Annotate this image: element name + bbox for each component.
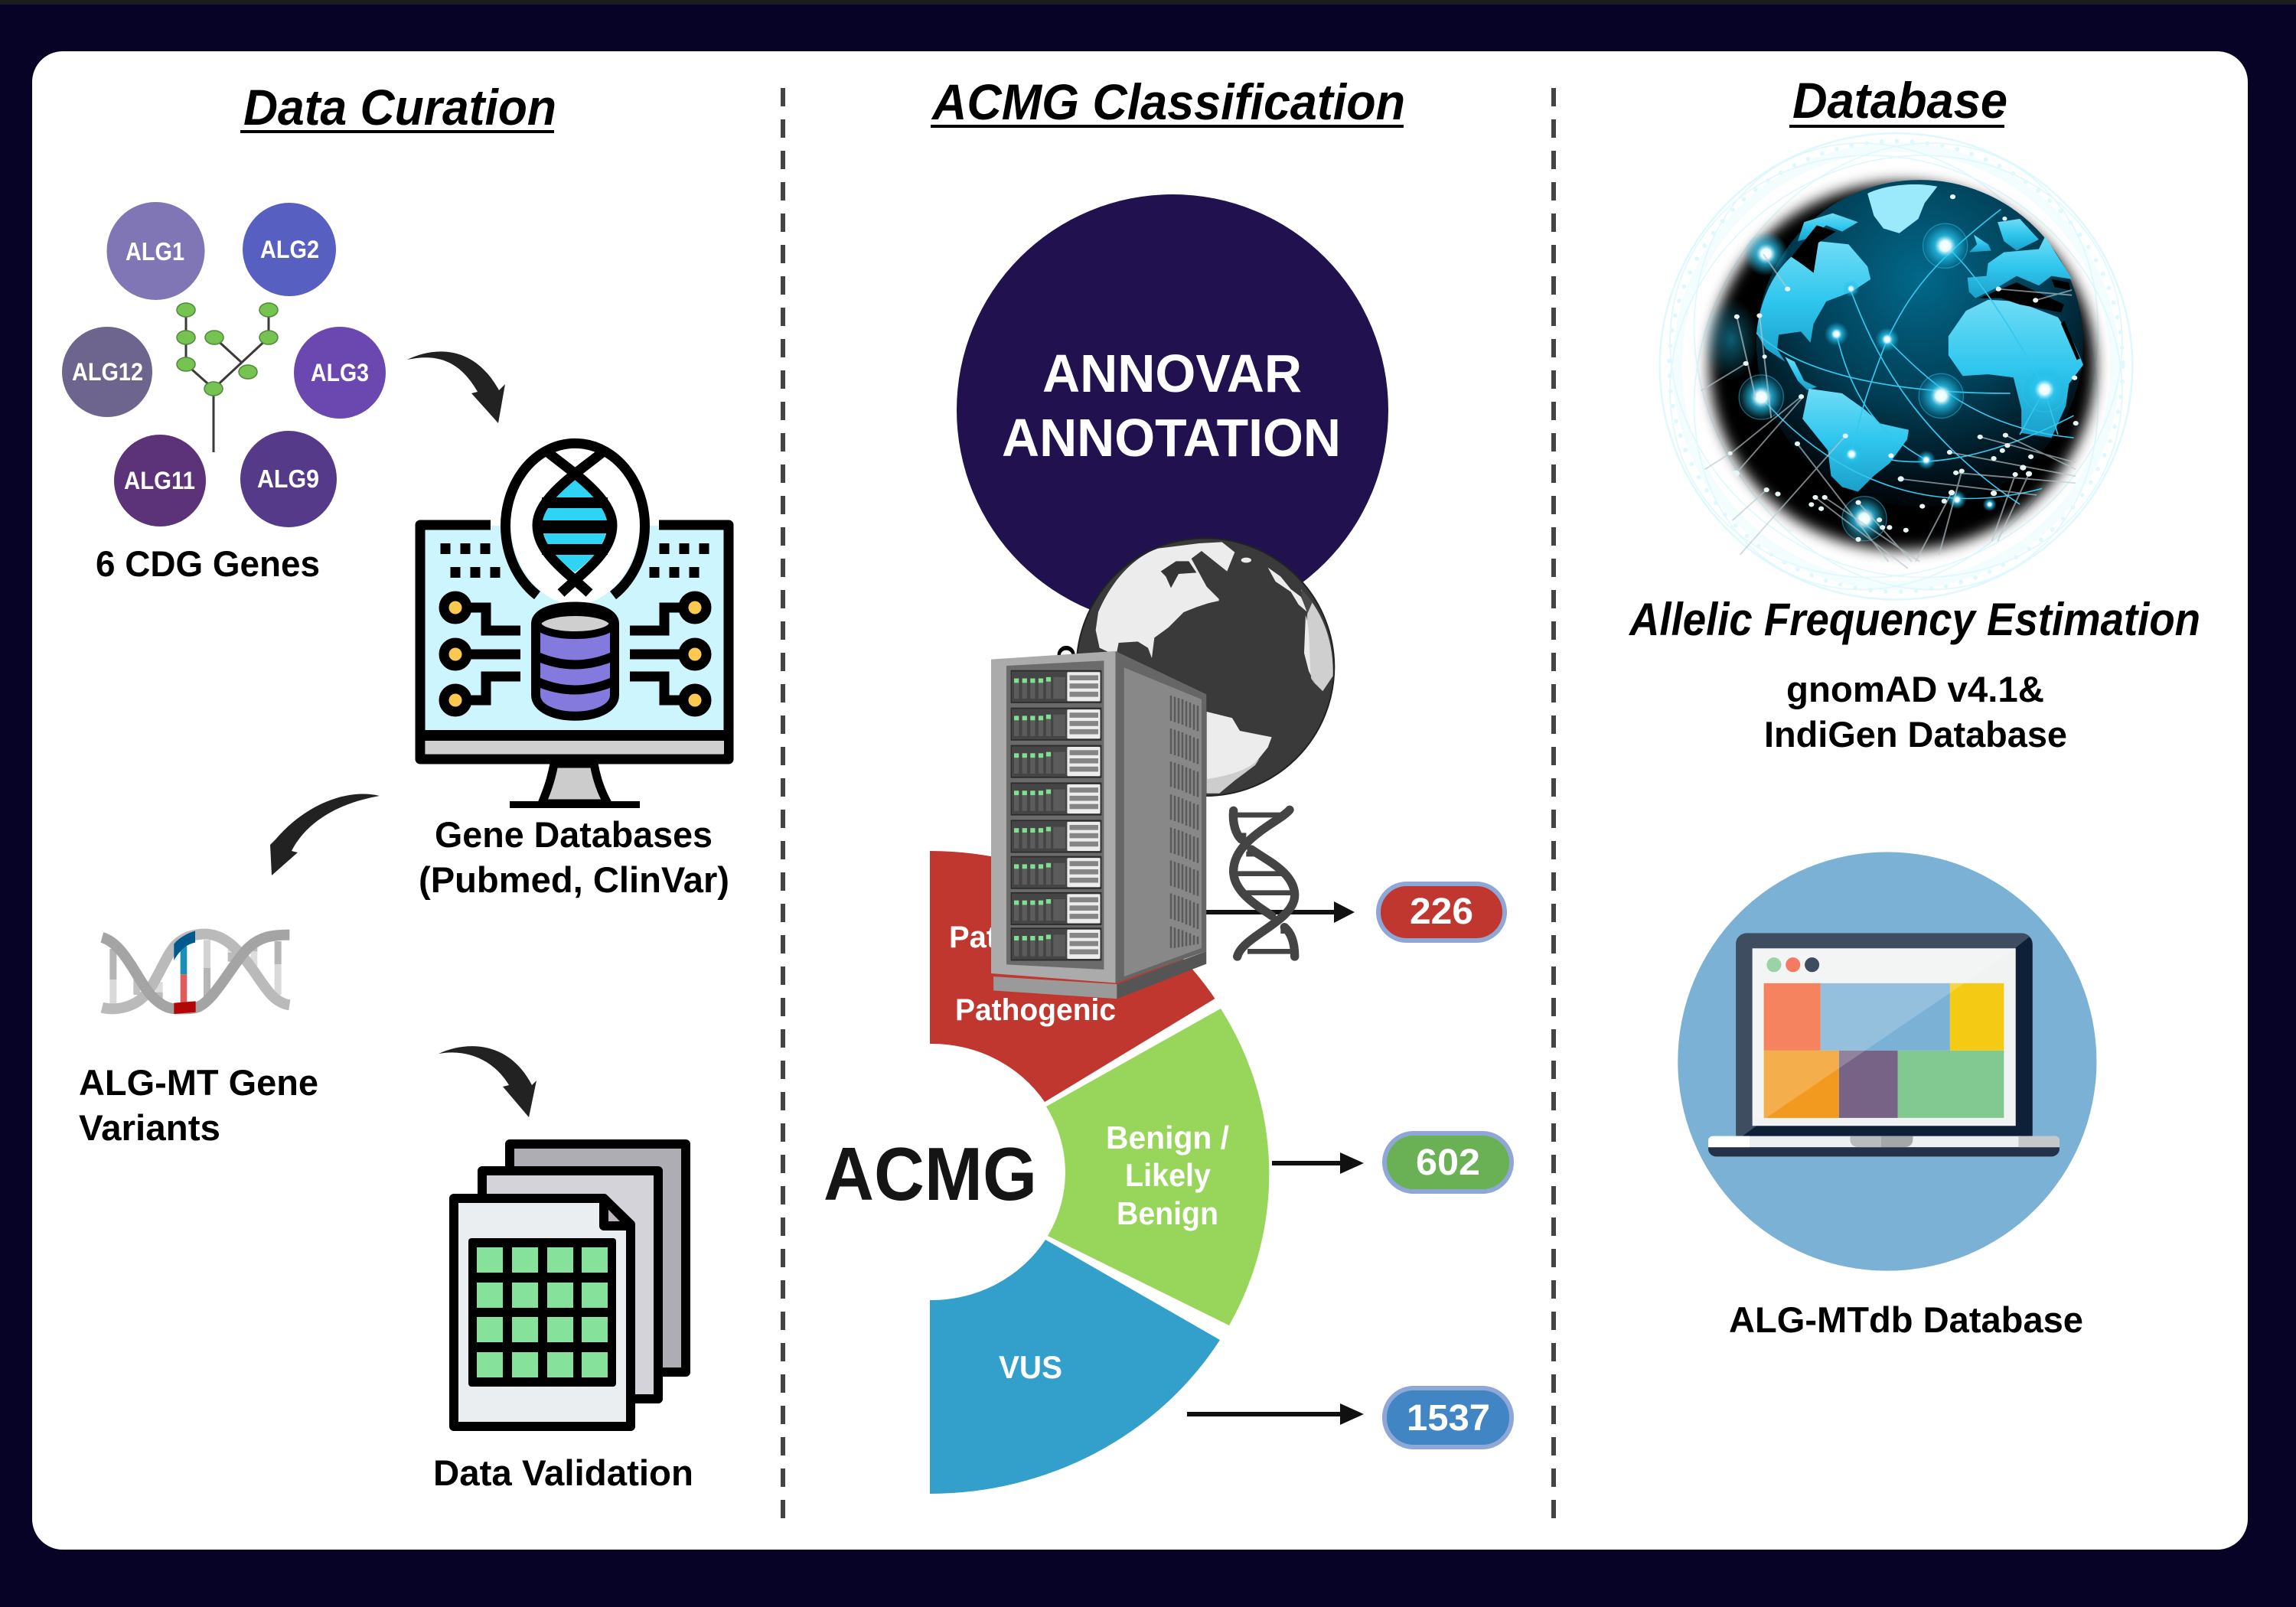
heading: database: Database xyxy=(1792,72,2007,129)
label: benign / likely benign: Benign xyxy=(1117,1195,1218,1231)
icon: DNA helix xyxy=(1233,810,1295,957)
annotation circle: ANNOVAR: ANNOTATION xyxy=(1002,408,1341,468)
gene: ALG2: ALG2 xyxy=(260,236,319,263)
count pill: 226 xyxy=(1378,884,1505,940)
icon: monitor with DNA and database xyxy=(420,424,729,808)
segment: pathogenic xyxy=(930,851,1215,1102)
icon: grey globe xyxy=(1077,538,1334,796)
gene: ALG3: ALG3 xyxy=(311,359,369,386)
count pill: 226: 226 xyxy=(1410,892,1473,932)
label: gnomAD and IndiGen: IndiGen Database xyxy=(1764,714,2067,755)
label: data validation: Data Validation xyxy=(433,1452,693,1493)
icon: grey DNA with highlighted variant xyxy=(102,931,289,1014)
gene: ALG12 xyxy=(62,327,152,417)
label: gnomAD and IndiGen: gnomAD v4.1& xyxy=(1786,669,2044,709)
icon: stacked data sheets xyxy=(454,1144,686,1426)
label: VUS: VUS xyxy=(999,1349,1062,1385)
label: benign / likely benign: Likely xyxy=(1125,1157,1212,1193)
panel: ACMG classification xyxy=(823,73,1512,1494)
label: pathogenic: Pathogenic xyxy=(955,993,1116,1027)
label: gnomAD and IndiGen xyxy=(1764,669,2067,755)
arrow: variants to validation xyxy=(439,1046,536,1117)
heading: data curation: Data Curation xyxy=(243,79,556,135)
label: ALG-MT gene variants: Variants xyxy=(79,1107,220,1148)
count pill: 602 xyxy=(1384,1133,1512,1191)
arrow: databases to variants xyxy=(270,794,380,875)
icon: networked blue globe xyxy=(1593,70,2200,663)
label: ALG-MT gene variants xyxy=(79,1062,318,1148)
gene: ALG11 xyxy=(114,435,206,526)
count pill: 1537 xyxy=(1384,1388,1512,1447)
label: 6 CDG genes: 6 CDG Genes xyxy=(96,543,320,584)
annotation circle: ANNOVAR xyxy=(957,194,1388,626)
arrow: pathogenic count xyxy=(1194,901,1355,923)
icon: server rack xyxy=(991,648,1206,999)
label: gene databases: (Pubmed, ClinVar) xyxy=(419,859,729,900)
gene: ALG11: ALG11 xyxy=(124,467,195,494)
gene: ALG2 xyxy=(243,203,336,296)
label: ALG-MT gene variants: ALG-MT Gene xyxy=(79,1062,318,1103)
gene circles with tree xyxy=(62,202,386,527)
gene: ALG9 xyxy=(240,431,337,527)
icon: laptop in blue circle xyxy=(1678,852,2096,1271)
label: benign / likely benign xyxy=(1106,1120,1229,1231)
arrow: benign count xyxy=(1272,1152,1364,1174)
label: allelic frequency estimation: Allelic Frequency Estimation xyxy=(1628,594,2200,645)
gene: ALG3 xyxy=(294,327,386,419)
segment: VUS xyxy=(930,1240,1220,1494)
gene: ALG12: ALG12 xyxy=(72,358,143,386)
icon: branching tree xyxy=(177,303,278,452)
heading: ACMG classification: ACMG Classification xyxy=(931,73,1405,130)
annotation circle: ANNOVAR: ANNOVAR xyxy=(1042,344,1302,403)
panel: data curation xyxy=(62,79,729,1493)
panel: database xyxy=(1593,70,2200,1340)
count pill: 602: 602 xyxy=(1416,1143,1480,1183)
gene: ALG9: ALG9 xyxy=(257,464,319,493)
segment: benign xyxy=(1046,1009,1269,1325)
label: pathogenic (upper, cut off): Pat xyxy=(949,921,996,954)
gene: ALG1 xyxy=(107,202,205,300)
label: gene databases: Gene Databases xyxy=(435,814,713,855)
top window strip xyxy=(0,0,2296,5)
label: benign / likely benign: Benign / xyxy=(1106,1120,1229,1156)
label: ACMG: ACMG xyxy=(823,1132,1037,1216)
count pill: 1537: 1537 xyxy=(1407,1398,1490,1439)
arrow: VUS count xyxy=(1187,1403,1364,1425)
ACMG semi-donut chart xyxy=(823,851,1269,1494)
label: ALG-MTdb database: ALG-MTdb Database xyxy=(1729,1299,2083,1340)
gene: ALG1: ALG1 xyxy=(126,237,184,266)
arrow: genes to databases xyxy=(407,351,505,423)
label: gene databases xyxy=(419,814,729,900)
